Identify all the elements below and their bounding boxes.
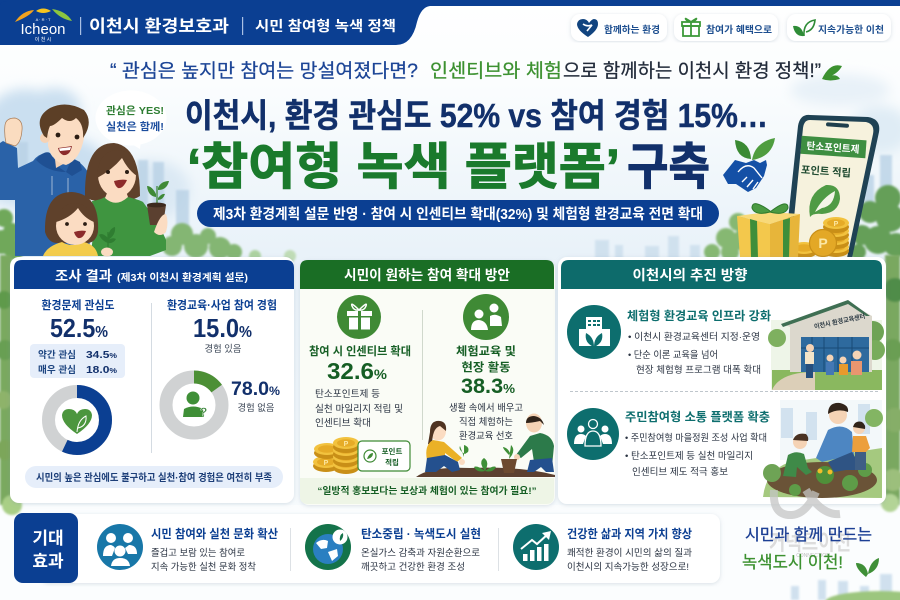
survey header: (제3차 이천시 환경계획 설문)	[117, 271, 248, 284]
effect 3: 건강한 삶과 지역 가치 향상	[567, 526, 692, 541]
small child	[852, 422, 870, 470]
effect 2: 온실가스 감축과 자원순환으로	[361, 547, 480, 559]
option: incentive: 32.6%	[327, 358, 388, 384]
direction 2: participation platform: 주민참여형 소통 플랫폼 확충	[625, 409, 770, 424]
parent gardener	[816, 403, 858, 472]
child	[43, 192, 116, 256]
option: hands-on education: 환경교육 선호	[459, 430, 513, 442]
direction 1: education infrastructure: • 이천시 환경교육센터 지정·운영	[628, 331, 760, 343]
icon: sprout	[856, 558, 879, 577]
family illustration	[0, 104, 169, 256]
gift side trees	[704, 213, 752, 261]
effect 3: 이천시의 지속가능한 성장으로!	[567, 562, 689, 573]
option: incentive: 실천 마일리지 적립 및	[315, 403, 403, 415]
effects badge: 효과	[32, 552, 64, 571]
effect 3	[513, 524, 692, 573]
man planting	[501, 414, 554, 473]
panel: survey results	[10, 257, 294, 503]
direction 1: education infrastructure: 체험형 환경교육 인프라 강화	[627, 308, 771, 323]
icon: heart leaf	[62, 409, 92, 434]
concern breakdown	[30, 344, 125, 378]
effect 3: 쾌적한 환경이 시민의 삶의 질과	[567, 547, 692, 559]
watermark: CONNECTION	[796, 553, 830, 559]
father	[0, 104, 90, 256]
phone banner: 탄소포인트제	[806, 139, 860, 156]
top right tags	[571, 14, 891, 41]
speech bubble: 관심은 YES!	[106, 104, 164, 117]
phone illustration: 포인트 적립	[801, 163, 851, 180]
option: incentive: 인센티브 확대	[315, 417, 371, 429]
tag: together: 함께하는 환경	[604, 24, 660, 36]
icon: person question: ?	[200, 405, 207, 419]
direction 2: participation platform: • 탄소포인트제 등 실천 마일리지	[625, 451, 753, 462]
tag: sustainable	[787, 14, 891, 41]
main title	[185, 97, 768, 195]
logo: Icheon	[15, 8, 72, 43]
stat: environmental concern: 52.5%	[50, 313, 108, 343]
stat: participation experience: 경험 있음	[204, 343, 242, 355]
speech bubble: 실천은 함께!	[106, 120, 164, 133]
direction 1: education infrastructure	[567, 305, 771, 376]
option: incentive: 탄소포인트제 등	[315, 389, 380, 400]
logo: Icheon: A · R · T	[36, 17, 51, 22]
icon: education center	[567, 305, 621, 359]
illustration: coins and point card	[313, 437, 410, 474]
main title: 이천시, 환경 관심도 52% vs 참여 경험 15%…	[185, 97, 768, 134]
concern breakdown: 매우 관심	[38, 364, 76, 376]
mother	[85, 143, 169, 256]
survey header: 조사 결과	[55, 268, 112, 284]
stat: no experience	[231, 379, 280, 414]
concern breakdown: 약간 관심	[38, 349, 76, 361]
concern breakdown: 34.5 %	[86, 349, 117, 361]
coins and gift box: P	[818, 235, 828, 251]
icon: handshake with sprout	[723, 138, 775, 192]
speech bubble	[96, 90, 166, 149]
main title: ‘참여형 녹색 플랫폼’	[187, 139, 620, 195]
handwritten quote: 으로 함께하는 이천시 환경 정책!”	[563, 60, 821, 82]
survey header	[14, 260, 294, 289]
handwritten quote: “ 관심은 높지만 참여는 망설여졌다면?	[110, 60, 418, 82]
stat: no experience: 경험 없음	[238, 402, 275, 414]
direction 2: participation platform: 인센티브 제도 적극 홍보	[632, 466, 728, 478]
option: incentive	[309, 295, 411, 429]
stat: environmental concern: 환경문제 관심도	[42, 298, 115, 312]
stat: participation experience: 환경교육·사업 참여 경험	[167, 298, 277, 312]
direction 2: participation platform	[567, 408, 770, 478]
donut: experience	[166, 377, 222, 433]
logo: Icheon: Icheon	[20, 22, 66, 38]
tag: sustainable: 지속가능한 이천	[818, 24, 884, 36]
stat: environmental concern	[42, 298, 115, 343]
middle trees	[162, 223, 296, 262]
seedlings	[460, 445, 513, 472]
stat: participation experience: 15.0%	[193, 313, 252, 343]
stat: no experience: 78.0%	[231, 379, 280, 400]
coins and gift box: P	[834, 221, 839, 228]
woman planting	[425, 421, 465, 472]
coins and gift box	[737, 204, 849, 258]
effects badge: 기대	[32, 529, 64, 548]
direction 2: participation platform: • 주민참여형 마을정원 조성 사업 확대	[625, 432, 767, 444]
directions header: 이천시의 추진 방향	[632, 267, 748, 283]
closing slogan: 시민과 함께 만드는	[745, 526, 872, 544]
icon: people	[463, 294, 509, 340]
main title: 구축	[627, 139, 710, 195]
illustration: planting together	[416, 414, 555, 477]
concern breakdown: 18.0 %	[86, 364, 117, 376]
option: incentive: 참여 시 인센티브 확대	[309, 344, 411, 358]
left trees	[0, 209, 24, 260]
stat: participation experience	[167, 298, 277, 355]
effect 1	[97, 524, 278, 573]
panel: city policy directions	[558, 257, 886, 504]
effect 2	[305, 524, 481, 573]
direction 1: education infrastructure: • 단순 이론 교육을 넘어	[628, 350, 718, 361]
phone illustration	[784, 115, 879, 258]
icon: earth with sprout	[305, 524, 351, 570]
illustration: coins and point card: 적립	[385, 457, 399, 467]
option: hands-on education: 체험교육 및	[456, 344, 516, 358]
closing slogan	[742, 526, 879, 577]
illustration: coins and point card: 포인트	[382, 446, 402, 456]
illustration: coins and point card: P	[324, 460, 329, 467]
option: hands-on education: 직접 체험하는	[459, 416, 513, 428]
icon: citizens	[97, 524, 143, 570]
icon: gift	[337, 295, 381, 339]
watermark	[769, 490, 851, 559]
effect 1: 즐겁고 보람 있는 참여로	[151, 547, 245, 559]
effects badge	[14, 513, 78, 583]
right trees	[850, 185, 900, 260]
tag: benefit: 참여가 혜택으로	[706, 24, 772, 36]
donut: concern	[48, 392, 106, 448]
illustration: coins and point card: P	[344, 441, 349, 448]
requests header	[300, 260, 554, 289]
direction 1: education infrastructure: 현장 체험형 프로그램 대폭 확대	[636, 364, 761, 376]
handwritten quote	[110, 60, 842, 82]
icon: growth chart	[513, 524, 559, 570]
handwritten quote: 인센티브와 체험	[430, 60, 562, 82]
tag: together	[571, 14, 667, 41]
option: hands-on education: 현장 활동	[462, 360, 511, 374]
tag: benefit	[674, 14, 778, 41]
quote strip: “일방적 홍보보다는 보상과 체험이 있는 참여가 필요!”	[318, 485, 537, 497]
effect 1: 시민 참여와 실천 문화 확산	[151, 526, 278, 541]
survey takeaway: 시민의 높은 관심에도 불구하고 실천·참여 경험은 여전히 부족	[36, 471, 272, 484]
header band	[0, 0, 900, 45]
illustration: community garden	[763, 400, 883, 498]
effect 1: 지속 가능한 실천 문화 정착	[151, 562, 256, 573]
header subtitle: 시민 참여형 녹색 정책	[255, 18, 396, 34]
header title: 이천시 환경보호과	[89, 17, 229, 36]
subtitle pill	[197, 200, 719, 227]
directions header	[561, 260, 882, 289]
illustration: education center building	[768, 300, 885, 390]
quote strip	[300, 478, 554, 504]
option: hands-on education	[449, 294, 523, 442]
subtitle pill: 제3차 환경계획 설문 반영 · 참여 시 인센티브 확대(32%) 및 체험형 환경교육 전면 확대	[213, 206, 703, 223]
phone banner	[800, 136, 867, 158]
watermark: 커넥트이천	[769, 530, 851, 555]
closing slogan: 녹색도시 이천!	[742, 553, 843, 572]
icon: leaf	[822, 65, 842, 80]
requests header: 시민이 원하는 참여 확대 방안	[344, 267, 510, 283]
logo: Icheon: 이 천 시	[35, 36, 51, 43]
panel: citizen requests	[300, 260, 555, 505]
effect 2: 탄소중립 · 녹색도시 실현	[361, 526, 481, 541]
illustration: education center building: 이천시 환경교육센터	[813, 311, 866, 331]
option: hands-on education: 38.3%	[461, 375, 515, 398]
child gardener	[783, 434, 812, 477]
effect 2: 깨끗하고 건강한 환경 조성	[361, 561, 465, 573]
survey takeaway	[25, 466, 283, 488]
panel: expected effects	[14, 513, 720, 583]
icon: community	[567, 408, 619, 460]
option: hands-on education: 생활 속에서 배우고	[449, 402, 523, 414]
